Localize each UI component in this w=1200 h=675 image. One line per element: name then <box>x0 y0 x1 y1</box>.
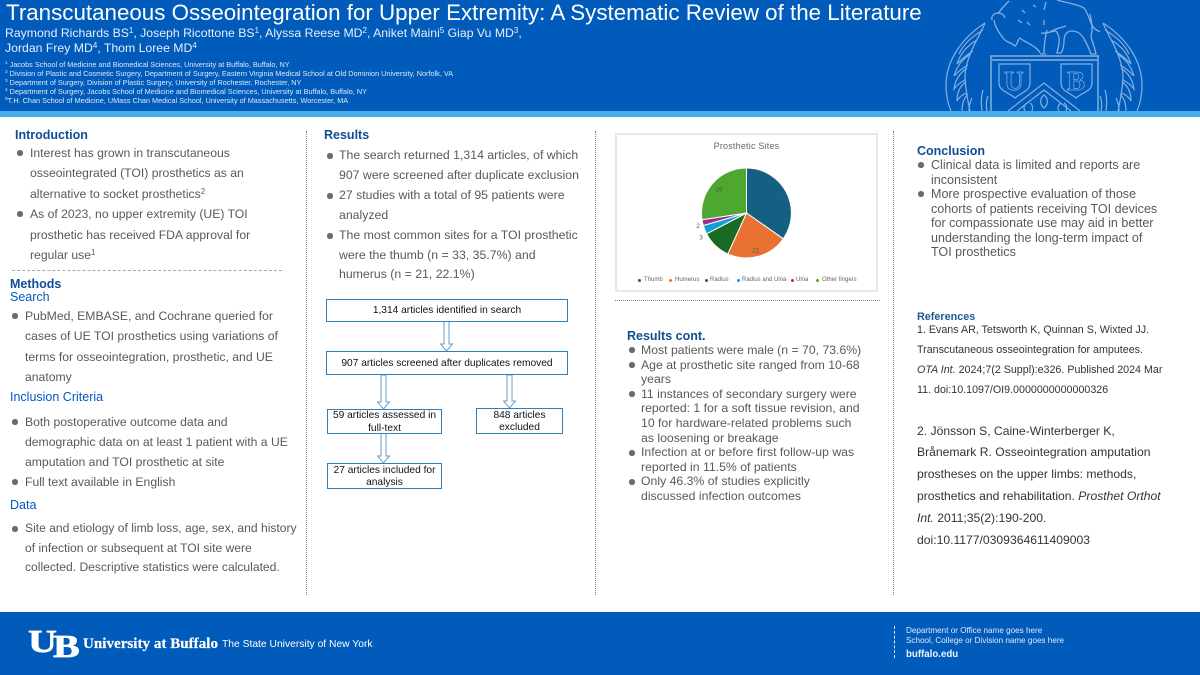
divider <box>595 131 596 595</box>
box: full text assessed <box>327 409 442 434</box>
divider <box>306 131 307 595</box>
box: included: 27 articles included for <box>334 464 435 476</box>
box: excluded: 848 articles <box>493 410 546 420</box>
chart legend: Other fingers <box>822 277 857 283</box>
reference 1 <box>917 324 1162 396</box>
title: Transcutaneous Osseointegration for Upper Extremity: A Systematic Review of the Literature <box>6 0 922 25</box>
inclusion bullet list: Both postoperative outcome data and <box>25 415 228 429</box>
box: excluded: excluded <box>499 422 540 433</box>
intro bullet list: regular use1 <box>30 248 95 262</box>
pie chart <box>696 168 791 258</box>
search bullet list <box>12 309 278 384</box>
intro bullet list: alternative to socket prosthetics2 <box>30 187 205 201</box>
divider <box>12 270 282 271</box>
heading: results: Results <box>324 128 369 142</box>
results continued bullet list: 11 instances of secondary surgery were <box>641 387 857 401</box>
reference 2: doi:10.1177/0309364611409003 <box>917 533 1090 547</box>
affiliations: 1 Jacobs School of Medicine and Biomedical Sciences, University at Buffalo, Buffalo, NY <box>5 60 290 68</box>
box: included <box>327 463 442 489</box>
reference 1: 11. doi:10.1097/OI9.0000000000000326 <box>917 384 1108 396</box>
subheading: data: Data <box>10 498 36 512</box>
results bullet list: The most common sites for a TOI prosthetic <box>339 228 578 242</box>
reference 2: prosthetics and rehabilitation. Prosthet Orthot <box>917 489 1161 503</box>
intro bullet list: Interest has grown in transcutaneous <box>30 146 230 160</box>
inclusion bullet list <box>12 415 288 489</box>
flow diagram <box>326 299 568 489</box>
heading: introduction: Introduction <box>15 128 88 142</box>
conclusion bullet list: for compassionate use may aid in better <box>931 216 1153 230</box>
arrow: full text to included <box>377 434 390 463</box>
tagline: The State University of New York <box>222 639 373 650</box>
chart legend: Humerus <box>675 277 699 283</box>
search bullet list: terms for osseointegration, prosthetic, and UE <box>25 350 273 364</box>
results bullet list <box>327 148 579 281</box>
conclusion bullet list: Clinical data is limited and reports are <box>931 158 1140 172</box>
results bullet list: humerus (n = 21, 22.1%) <box>339 267 475 281</box>
search bullet list: cases of UE TOI prosthetics using variations of <box>25 329 278 343</box>
wordmark: University at Buffalo <box>83 636 218 652</box>
results bullet list: 907 were screened after duplicate exclusion <box>339 168 579 182</box>
box: full text assessed: 59 articles assessed in <box>333 410 436 421</box>
reference 2: 2. Jönsson S, Caine-Winterberger K, <box>917 424 1115 438</box>
reference 1: OTA Int. 2024;7(2 Suppl):e326. Published 2024 Mar <box>917 364 1162 376</box>
panel: results continued <box>627 329 861 503</box>
affiliations: 2 Division of Plastic and Cosmetic Surgery, Department of Surgery, Eastern Virginia Medical School at Old Dominion University, Norfolk, VA <box>5 68 453 78</box>
arrow: search to screening <box>440 322 454 351</box>
chart title: Prosthetic Sites <box>714 141 779 151</box>
reference 1: Transcutaneous osseointegration for amputees. <box>917 344 1143 356</box>
pie chart: 26 <box>715 186 723 194</box>
heading: conclusion: Conclusion <box>917 144 985 158</box>
footer divider <box>894 626 895 658</box>
results bullet list: analyzed <box>339 208 388 222</box>
chart legend: Radius and Ulna <box>742 277 786 283</box>
panel: introduction <box>15 128 250 262</box>
intro bullet list <box>17 146 250 262</box>
footer banner <box>0 612 1200 675</box>
results continued bullet list: as loosening or breakage <box>641 431 779 445</box>
reference 2: Brånemark R. Osseointegration amputation <box>917 445 1150 459</box>
panel: results <box>324 128 579 281</box>
results continued bullet list: Age at prosthetic site ranged from 10-68 <box>641 358 860 372</box>
crest watermark <box>945 0 1143 111</box>
heading: results cont.: Results cont. <box>627 329 706 343</box>
results continued bullet list: years <box>641 372 671 386</box>
department text <box>906 626 1064 644</box>
chart legend <box>638 276 857 283</box>
arrow: screening to excluded <box>503 375 516 408</box>
heading: methods: Methods <box>10 277 61 291</box>
chart legend: Thumb <box>644 277 663 283</box>
panel: methods <box>10 277 297 574</box>
box: excluded <box>476 408 563 434</box>
search bullet list: PubMed, EMBASE, and Cochrane queried for <box>25 309 273 323</box>
header banner <box>0 0 1200 117</box>
inclusion bullet list: Full text available in English <box>25 475 175 489</box>
conclusion bullet list: TOI prosthetics <box>931 245 1016 259</box>
data bullet list: of infection or subsequent at TOI site were <box>25 541 252 555</box>
shield <box>990 56 1099 111</box>
department text: School, College or Division name goes here <box>906 636 1064 644</box>
pie chart: 33 <box>775 194 783 200</box>
bison <box>992 0 1100 54</box>
reference 2: Int. 2011;35(2):190-200. <box>917 511 1046 525</box>
website: buffalo.edu <box>906 649 958 660</box>
subheading: inclusion criteria: Inclusion Criteria <box>10 390 103 404</box>
panel: conclusion <box>917 144 1157 259</box>
right laurel <box>1100 23 1142 111</box>
UB monogram: B <box>53 628 80 664</box>
results continued bullet list <box>629 343 861 503</box>
heading: references: References <box>917 311 975 323</box>
pie chart: 3 <box>699 234 703 242</box>
search bullet list: anatomy <box>25 370 72 384</box>
box: articles screened: 907 articles screened after duplicates removed <box>341 358 553 369</box>
subheading: search: Search <box>10 290 50 304</box>
accent stripe <box>0 111 1200 117</box>
conclusion bullet list: More prospective evaluation of those <box>931 187 1136 201</box>
UB monogram: U <box>28 623 57 659</box>
affiliations: 3 Department of Surgery, Division of Plastic Surgery, University of Rochester, Rochester, NY <box>5 78 301 86</box>
arrow: screening to full text <box>377 375 390 409</box>
inclusion bullet list: demographic data on at least 1 patient with a UE <box>25 435 288 449</box>
conclusion bullet list <box>918 158 1157 259</box>
chart legend: Radius <box>710 277 729 283</box>
results continued bullet list: Most patients were male (n = 70, 73.6%) <box>641 343 861 357</box>
reference 2 <box>917 424 1161 547</box>
UB monogram <box>28 623 80 664</box>
intro bullet list: osseointegrated (TOI) prosthetics as an <box>30 166 244 180</box>
intro bullet list: prosthetic has received FDA approval for <box>30 228 250 242</box>
panel: references <box>917 311 1162 547</box>
divider <box>615 300 880 301</box>
results continued bullet list: Infection at or before first follow-up was <box>641 445 854 459</box>
results continued bullet list: 10 for hardware-related problems such <box>641 416 851 430</box>
pie chart: 10 <box>721 231 729 238</box>
pie chart: 2 <box>696 223 700 230</box>
affiliations: 4 Department of Surgery, Jacobs School of Medicine and Biomedical Sciences, University at Buffalo, Buffalo, NY <box>5 86 367 96</box>
reference 2: prostheses on the upper limbs: methods, <box>917 467 1136 481</box>
data bullet list: collected. Descriptive statistics were calculated. <box>25 560 280 574</box>
reference 1: 1. Evans AR, Tetsworth K, Quinnan S, Wixted JJ. <box>917 324 1149 336</box>
chart legend: Ulna <box>796 277 808 283</box>
data bullet list <box>12 521 297 574</box>
results bullet list: The search returned 1,314 articles, of which <box>339 148 578 162</box>
intro bullet list: As of 2023, no upper extremity (UE) TOI <box>30 207 248 221</box>
left laurel <box>946 23 988 111</box>
conclusion bullet list: cohorts of patients receiving TOI devices <box>931 202 1157 216</box>
results continued bullet list: reported in 11.5% of patients <box>641 460 797 474</box>
affiliations <box>5 60 454 104</box>
crest watermark: B <box>1067 66 1085 96</box>
affiliations: 5T.H. Chan School of Medicine, UMass Chan Medical School, University of Massachusetts, Worcester, MA <box>5 96 348 104</box>
data bullet list: Site and etiology of limb loss, age, sex, and history <box>25 521 297 535</box>
department text: Department or Office name goes here <box>906 626 1042 635</box>
inclusion bullet list: amputation and TOI prosthetic at site <box>25 455 224 469</box>
box: articles identified <box>326 299 568 322</box>
results continued bullet list: discussed infection outcomes <box>641 489 801 503</box>
authors <box>5 26 522 55</box>
box: included: analysis <box>366 477 403 488</box>
results bullet list: 27 studies with a total of 95 patients were <box>339 188 565 202</box>
box: full text assessed: full-text <box>368 422 401 434</box>
box: articles screened <box>326 351 568 375</box>
divider <box>893 131 894 595</box>
shield initials: U <box>1004 66 1024 96</box>
authors: Raymond Richards BS1, Joseph Ricottone BS1, Alyssa Reese MD2, Aniket Maini5 Giap Vu MD3, <box>5 26 522 40</box>
results bullet list: were the thumb (n = 33, 35.7%) and <box>339 248 536 262</box>
authors: Jordan Frey MD4, Thom Loree MD4 <box>5 41 197 55</box>
conclusion bullet list: understanding the long-term impact of <box>931 230 1142 244</box>
box: articles identified: 1,314 articles identified in search <box>373 305 521 316</box>
results continued bullet list: reported: 1 for a soft tissue revision, and <box>641 401 860 415</box>
conclusion bullet list: inconsistent <box>931 172 997 186</box>
panel: pie chart <box>615 133 878 292</box>
pie chart: 21 <box>752 248 760 254</box>
university logo <box>28 623 373 664</box>
results continued bullet list: Only 46.3% of studies explicitly <box>641 474 810 488</box>
